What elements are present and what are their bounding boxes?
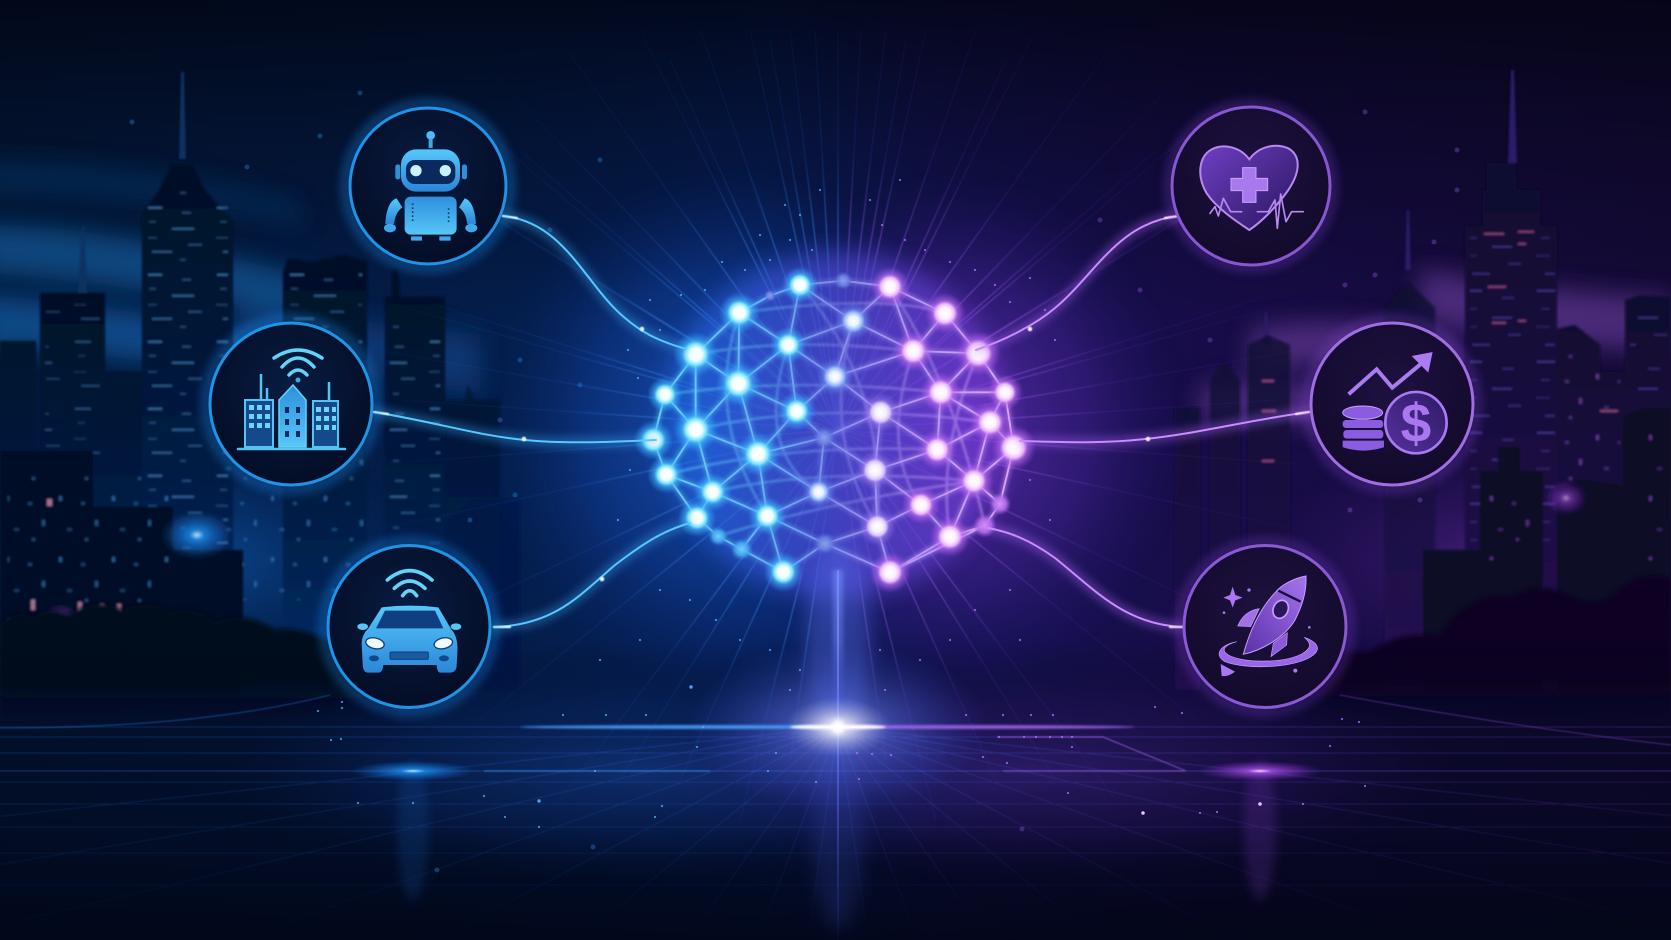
central glow (485, 165, 1190, 695)
icon: robot (384, 131, 477, 241)
badge: connected car (324, 542, 494, 712)
dark trees and haze along the horizon (0, 576, 1671, 940)
faint light curves on the floor (0, 695, 1671, 745)
network nodes (633, 266, 1036, 593)
radial light rays (200, 30, 1476, 820)
badge: finance (1307, 319, 1477, 489)
icon: smart city with wifi (238, 350, 345, 449)
blue floor flare (351, 760, 475, 900)
icon: car with wifi (357, 571, 461, 673)
perspective floor grid (0, 726, 1671, 910)
center light column (806, 540, 870, 940)
connector: space and innovation to network (988, 528, 1184, 627)
purple floor flare (1198, 760, 1322, 900)
network edge glow (653, 281, 1014, 572)
icon: rocket with orbit ring (1219, 576, 1317, 676)
connector: robotics to network (503, 216, 686, 349)
badge: healthcare (1169, 104, 1333, 268)
skyline left (0, 72, 520, 690)
skyline right (1175, 70, 1671, 690)
badge: smart city (206, 319, 376, 489)
floating particles (132, 93, 1457, 870)
icon: coins and growth arrow: $ (1401, 392, 1431, 454)
network edges (653, 281, 1014, 572)
connector: connected car to network (494, 523, 690, 627)
connector: smart city to network (374, 412, 656, 442)
neural network sphere (633, 266, 1036, 593)
icon: heart with medical cross and pulse (1200, 146, 1303, 230)
glow flare on the horizon (520, 642, 1135, 812)
connector: finance to network (1020, 412, 1309, 442)
inner mesh (665, 285, 990, 537)
badge: robot (346, 104, 510, 268)
badge: rocket (1180, 542, 1350, 712)
icon: coins and growth arrow (1343, 352, 1447, 454)
connector: healthcare to network (976, 216, 1179, 350)
